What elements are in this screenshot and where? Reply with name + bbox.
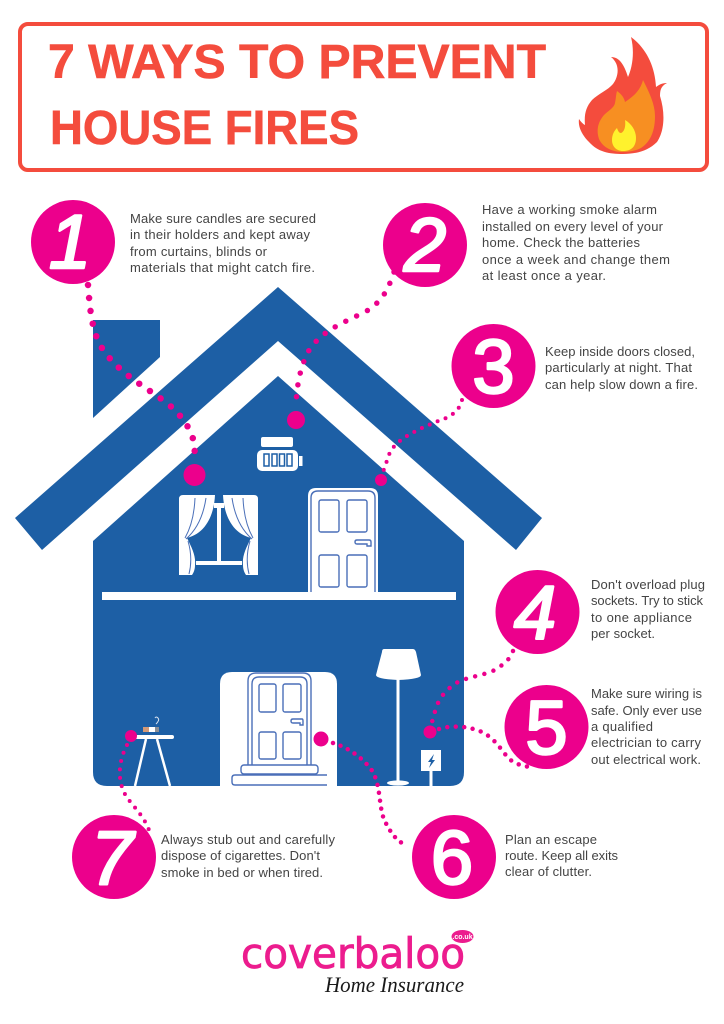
step 2 text: installed on every level of your bbox=[482, 219, 664, 234]
dotted connector 3 bbox=[375, 400, 462, 486]
step 4 text: to one appliance bbox=[591, 610, 692, 625]
step 4 text: Don't overload plug bbox=[591, 577, 705, 592]
step 2 text: home. Check the batteries bbox=[482, 235, 640, 250]
number badge 7 bbox=[72, 815, 156, 901]
number badge 6 bbox=[412, 815, 496, 901]
title panel bbox=[20, 24, 707, 170]
step 1 bbox=[31, 200, 316, 285]
house bbox=[15, 287, 542, 786]
roof bbox=[15, 287, 542, 550]
number badge 3: 3 bbox=[472, 325, 515, 410]
step 2 text: Have a working smoke alarm bbox=[482, 202, 657, 217]
step 5 text: out electrical work. bbox=[591, 752, 701, 767]
number badge 4 bbox=[496, 570, 580, 656]
floor divider bbox=[102, 592, 456, 600]
step 3 text: Keep inside doors closed, bbox=[545, 344, 695, 359]
dotted connector 7 bbox=[120, 730, 149, 830]
dotted connector 4 bbox=[424, 651, 513, 738]
number badge 1: 1 bbox=[49, 200, 91, 285]
step 3 text: can help slow down a fire. bbox=[545, 377, 698, 392]
icon: side table with cigarette bbox=[133, 717, 174, 786]
dotted connector 6 bbox=[314, 732, 408, 846]
step 2 text: at least once a year. bbox=[482, 268, 606, 283]
number badge 2 bbox=[383, 203, 467, 288]
step 1 text: materials that might catch fire. bbox=[130, 260, 315, 275]
step 7 text: dispose of cigarettes. Don't bbox=[161, 848, 320, 863]
step 5 text: safe. Only ever use bbox=[591, 703, 702, 718]
icon: plug socket bbox=[421, 750, 441, 786]
logo: coverbaloo Home Insurance: Home Insurance bbox=[324, 972, 464, 997]
icon: bedroom door bbox=[308, 488, 378, 592]
step 1 text: Make sure candles are secured bbox=[130, 211, 316, 226]
logo: coverbaloo Home Insurance: .co.uk bbox=[452, 934, 473, 941]
step 4 text: sockets. Try to stick bbox=[591, 593, 704, 608]
icon: front door bbox=[220, 672, 337, 786]
heading: 7 WAYS TO PREVENT bbox=[48, 36, 546, 89]
step 6 bbox=[412, 815, 618, 901]
step 7 bbox=[72, 815, 336, 901]
step 5 text: Make sure wiring is bbox=[591, 686, 702, 701]
heading: HOUSE FIRES bbox=[50, 102, 359, 155]
step 2 text: once a week and change them bbox=[482, 252, 670, 267]
step 1 text: in their holders and kept away bbox=[130, 227, 310, 242]
step 4 text: per socket. bbox=[591, 626, 655, 641]
step 5 text: a qualified bbox=[591, 719, 653, 734]
step 6 text: clear of clutter. bbox=[505, 864, 592, 879]
number badge 4: 4 bbox=[514, 571, 556, 656]
house body bbox=[93, 376, 464, 786]
step 7 text: Always stub out and carefully bbox=[161, 832, 336, 847]
chimney bbox=[93, 320, 160, 418]
number badge 3 bbox=[452, 324, 536, 410]
number badge 5 bbox=[504, 685, 588, 771]
dotted connector 1 bbox=[88, 285, 206, 486]
number badge 7: 7 bbox=[91, 816, 136, 901]
step 1 text: from curtains, blinds or bbox=[130, 244, 268, 259]
step 6 text: route. Keep all exits bbox=[505, 848, 618, 863]
step 3 text: particularly at night. That bbox=[545, 360, 692, 375]
number badge 5: 5 bbox=[525, 686, 568, 771]
icon: floor lamp bbox=[376, 649, 421, 786]
step 5 bbox=[504, 685, 702, 771]
icon: flame bbox=[579, 37, 667, 154]
dotted connector 2 bbox=[287, 272, 394, 429]
icon: window with curtains bbox=[179, 495, 258, 575]
number badge 1 bbox=[31, 200, 115, 285]
number badge 2: 2 bbox=[403, 203, 446, 288]
step 2 bbox=[383, 202, 670, 288]
number badge 6: 6 bbox=[431, 816, 473, 901]
step 4 bbox=[496, 570, 705, 656]
step 3 bbox=[452, 324, 698, 410]
logo: coverbaloo Home Insurance: coverbaloo bbox=[241, 929, 465, 978]
step 5 text: electrician to carry bbox=[591, 735, 702, 750]
heading bbox=[48, 36, 546, 155]
dotted connector 5 bbox=[439, 727, 530, 767]
step 6 text: Plan an escape bbox=[505, 832, 597, 847]
icon: smoke alarm bbox=[257, 437, 302, 471]
step 7 text: smoke in bed or when tired. bbox=[161, 865, 323, 880]
